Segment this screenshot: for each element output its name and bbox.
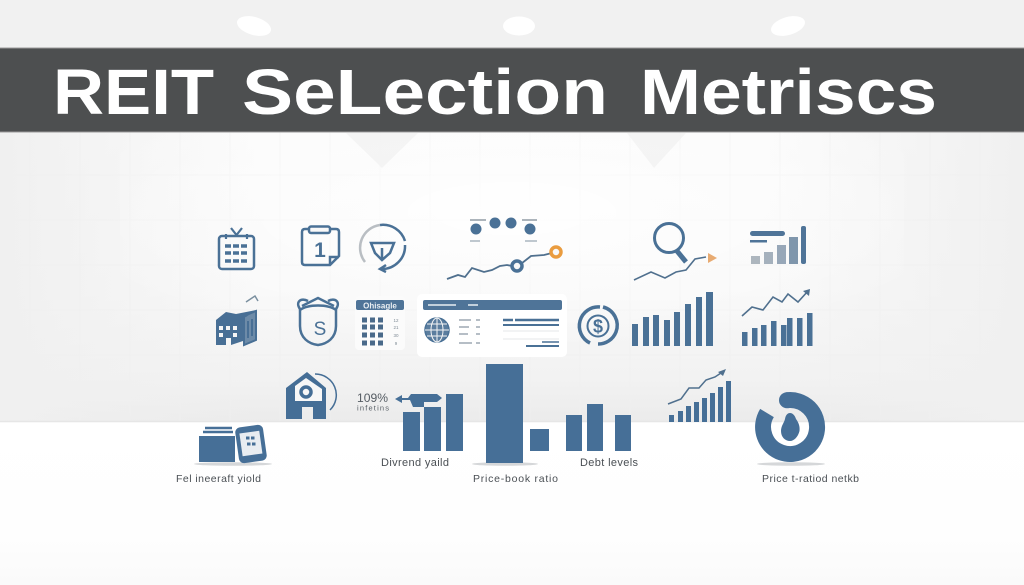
icon: magnifier with trend arrow [634, 224, 717, 280]
callout: percent: infetins [357, 404, 389, 412]
bar chart: rising [632, 292, 713, 346]
background: ceiling [0, 0, 1024, 48]
icon: dollar coin [579, 307, 617, 344]
icon: office building [216, 296, 258, 345]
bar chart with upward trend [668, 369, 731, 422]
table card: 12 [393, 318, 399, 323]
title: REIT [53, 56, 214, 128]
label: debt levels: Debt levels [580, 457, 638, 469]
table card: 9 [395, 341, 398, 346]
callout: percent [357, 391, 389, 412]
bar chart: dividend yield [395, 394, 463, 451]
icon: shield with S: S [314, 319, 326, 340]
label: price ratio: Price t-ratiod netkb [762, 473, 859, 485]
label: yield: Fel ineeraft yiold [176, 473, 261, 485]
table card: 21 [393, 325, 399, 330]
bar chart: price-book [472, 364, 549, 466]
ceiling lights [235, 13, 807, 39]
icon: dollar coin: $ [593, 316, 603, 336]
icon: circular shield arrows [360, 225, 405, 272]
bar chart with trend arrow [742, 289, 812, 346]
icon: house with gear [286, 372, 336, 419]
background: floor [0, 422, 1024, 585]
label: price-book ratio: Price-book ratio [473, 473, 558, 485]
icon: globe [425, 318, 449, 342]
dashboard panel [417, 294, 567, 357]
icon: folder and phone [194, 424, 272, 466]
title: Metriscs [640, 56, 937, 128]
line chart with status dots [447, 218, 561, 279]
title: SeLection [242, 56, 608, 128]
label: dividend yield: Divrend yaild [381, 457, 449, 469]
icon: donut with drop [757, 392, 825, 466]
icon: calendar day one [302, 226, 339, 265]
bar chart: debt levels [566, 404, 631, 451]
title banner [0, 48, 1024, 132]
icon: bars with heading lines [750, 226, 806, 264]
table card: Ohisagle [363, 302, 397, 310]
table card [355, 296, 405, 350]
icon: shield with S [298, 298, 338, 345]
callout: percent: 109% [357, 391, 388, 405]
background: wall [0, 132, 1024, 422]
icon: calendar [219, 228, 254, 269]
table card: 30 [393, 333, 399, 338]
icon: calendar day one: 1 [314, 239, 326, 262]
